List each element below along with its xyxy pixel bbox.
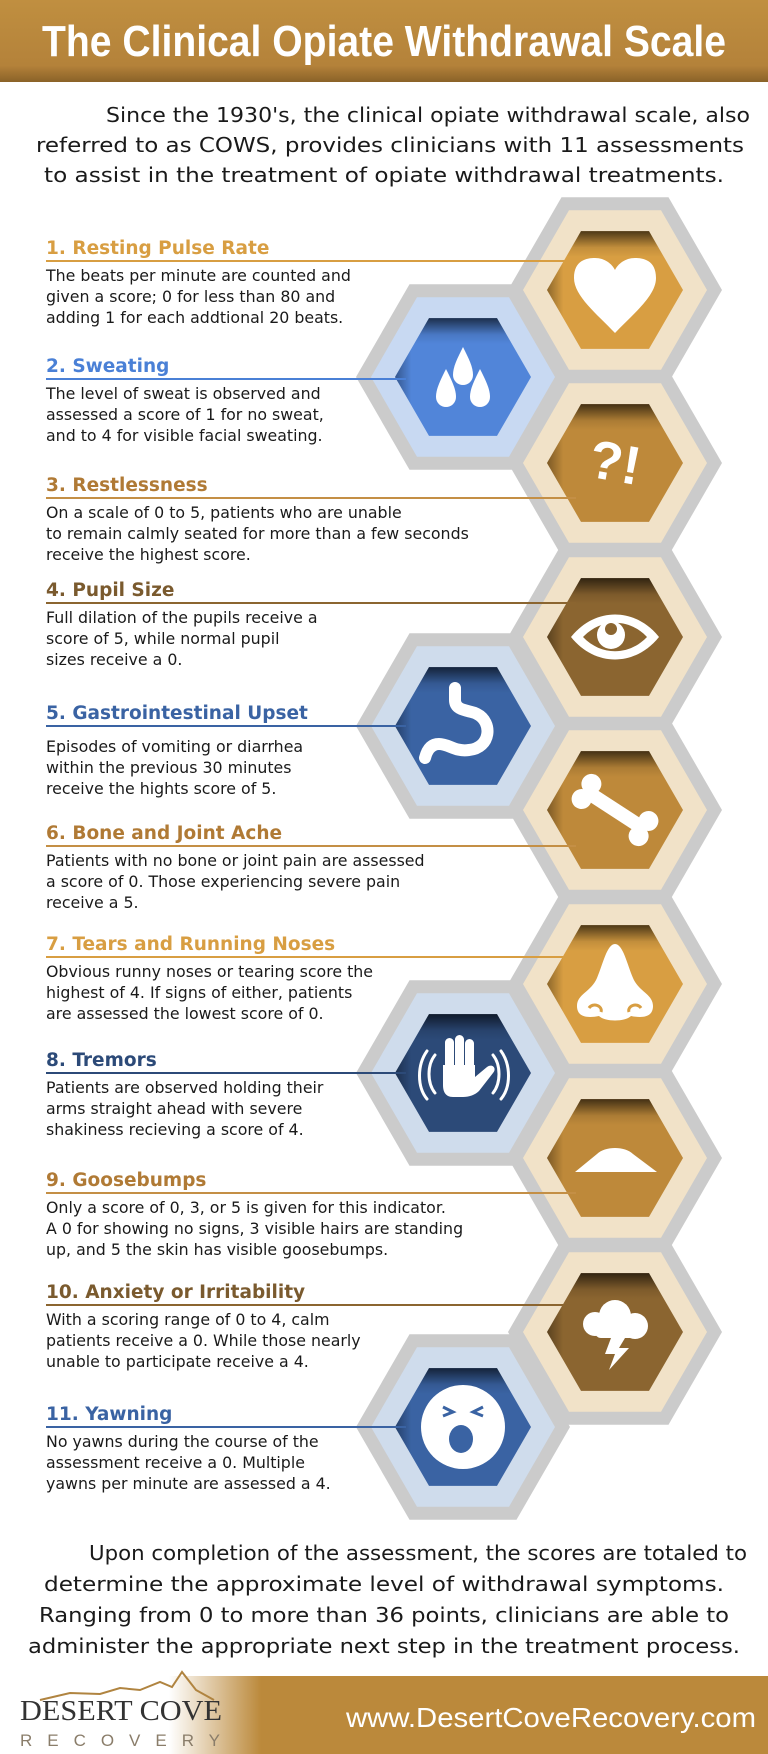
item 4: Pupil Size: Full dilation of the pupils receive a [46,608,318,627]
item 10: Anxiety or Irritability: 10. Anxiety or Irritability [46,1282,305,1303]
icon: heart [574,258,656,333]
icon: stomach [425,688,487,758]
item 5: Gastrointestinal Upset: Episodes of vomiting or diarrhea [46,737,303,756]
item 6: Bone and Joint Ache: receive a 5. [46,893,139,912]
item 6: Bone and Joint Ache: 6. Bone and Joint Ache [46,823,282,844]
item 6: Bone and Joint Ache: a score of 0. Those experiencing severe pain [46,872,400,891]
conclusion text: determine the approximate level of withdrawal symptoms. [44,1572,724,1596]
item 9: Goosebumps: Only a score of 0, 3, or 5 is given for this indicator. [46,1198,446,1217]
icon: nose [577,944,653,1020]
item 6: Bone and Joint Ache: Patients with no bone or joint pain are assessed [46,851,425,870]
item 4: Pupil Size: score of 5, while normal pupil [46,629,279,648]
item 5: Gastrointestinal Upset: 5. Gastrointestinal Upset [46,703,308,724]
item 3: Restlessness: receive the highest score. [46,545,251,564]
icon: bone [568,770,662,850]
icon: question exclamation: ?! [585,429,645,497]
intro text: to assist in the treatment of opiate withdrawal treatments. [44,163,724,187]
item 1: Resting Pulse Rate: given a score; 0 for less than 80 and [46,287,335,306]
item 8: Tremors: 8. Tremors [46,1050,157,1071]
item 11: Yawning: 11. Yawning [46,1404,172,1425]
item 7: Tears and Running Noses [46,934,576,1023]
item 3: Restlessness: 3. Restlessness [46,475,208,496]
item 9: Goosebumps [46,1170,576,1259]
item 2: Sweating [45,356,406,445]
item 1: Resting Pulse Rate: 1. Resting Pulse Rate [46,238,269,259]
item 4: Pupil Size: 4. Pupil Size [46,580,174,601]
item 1: Resting Pulse Rate [45,238,576,327]
icon: eye [571,614,659,660]
icon: storm cloud [583,1300,648,1370]
icon: water drops [436,347,490,407]
item 8: Tremors: Patients are observed holding their [46,1078,324,1097]
icon: yawning face [421,1385,505,1469]
item 10: Anxiety or Irritability [46,1282,576,1371]
item 3: Restlessness: to remain calmly seated for more than a few seconds [46,524,469,543]
item 2: Sweating: assessed a score of 1 for no sweat, [46,405,324,424]
item 11: Yawning: No yawns during the course of the [46,1432,319,1451]
item 2: Sweating: and to 4 for visible facial sweating. [46,426,323,445]
item 3: Restlessness: On a scale of 0 to 5, patients who are unable [46,503,402,522]
header bar [0,0,768,82]
item 8: Tremors: arms straight ahead with severe [46,1099,302,1118]
item 5: Gastrointestinal Upset [46,703,406,798]
item 4: Pupil Size [46,580,576,669]
item 7: Tears and Running Noses: Obvious runny noses or tearing score the [46,962,373,981]
item 9: Goosebumps: 9. Goosebumps [46,1170,206,1191]
item 11: Yawning [46,1404,406,1493]
item 7: Tears and Running Noses: are assessed the lowest score of 0. [46,1004,324,1023]
item 7: Tears and Running Noses: highest of 4. If signs of either, patients [46,983,352,1002]
logo [20,1672,222,1750]
hexagon column [356,197,722,1520]
logo: DESERT COVE [20,1695,222,1727]
item 8: Tremors [46,1050,406,1139]
website url: www.DesertCoveRecovery.com [345,1702,756,1733]
item 10: Anxiety or Irritability: patients receive a 0. While those nearly [46,1331,361,1350]
item 9: Goosebumps: A 0 for showing no signs, 3 visible hairs are standing [46,1219,463,1238]
conclusion text: Upon completion of the assessment, the scores are totaled to [89,1541,747,1565]
item 8: Tremors: shakiness recieving a score of 4. [46,1120,304,1139]
intro text: referred to as COWS, provides clinicians with 11 assessments [36,133,744,157]
item 11: Yawning: yawns per minute are assessed a 4. [46,1474,331,1493]
item 4: Pupil Size: sizes receive a 0. [46,650,182,669]
conclusion text: Ranging from 0 to more than 36 points, clinicians are able to [39,1603,729,1627]
item 5: Gastrointestinal Upset: receive the hights score of 5. [46,779,276,798]
item 1: Resting Pulse Rate: The beats per minute are counted and [45,266,351,285]
item 2: Sweating: The level of sweat is observed and [45,384,321,403]
footer bar [0,1676,768,1754]
item 6: Bone and Joint Ache [46,823,576,912]
item 1: Resting Pulse Rate: adding 1 for each addtional 20 beats. [46,308,343,327]
item 11: Yawning: assessment receive a 0. Multiple [46,1453,305,1472]
icon: shaking hand [420,1035,508,1099]
icon: goosebump [575,1148,657,1172]
conclusion text: administer the appropriate next step in the treatment process. [28,1634,740,1658]
item 10: Anxiety or Irritability: With a scoring range of 0 to 4, calm [46,1310,330,1329]
item 2: Sweating: 2. Sweating [46,356,169,377]
item 7: Tears and Running Noses: 7. Tears and Running Noses [46,934,335,955]
logo: RECOVERY [20,1731,220,1750]
item 5: Gastrointestinal Upset: within the previous 30 minutes [46,758,292,777]
conclusion text [28,1541,747,1658]
item 3: Restlessness [46,475,576,564]
item 10: Anxiety or Irritability: unable to participate receive a 4. [46,1352,309,1371]
item 9: Goosebumps: up, and 5 the skin has visible goosebumps. [46,1240,388,1259]
intro text: Since the 1930's, the clinical opiate withdrawal scale, also [106,103,750,127]
intro text [36,103,750,187]
